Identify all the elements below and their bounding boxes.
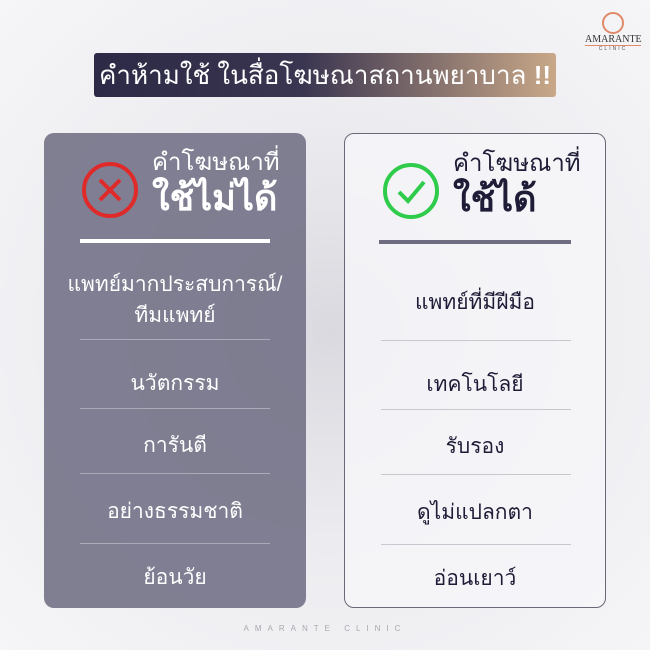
- panel: not allowed: อย่างธรรมชาติ: [107, 500, 243, 523]
- list items: แพทย์มากประสบการณ์/: [67, 273, 282, 296]
- heading: [453, 146, 581, 219]
- panel: not allowed: นวัตกรรม: [131, 372, 219, 395]
- heading: คำโฆษณาที่: [152, 149, 280, 176]
- logo: [585, 12, 642, 52]
- icon: green check: [383, 163, 439, 219]
- list items: แพทย์ที่มีฝีมือ: [415, 291, 535, 314]
- title bar: [94, 53, 556, 97]
- panel: not allowed: [44, 133, 306, 608]
- panel: allowed: อ่อนเยาว์: [434, 567, 516, 590]
- logo: CLINIC: [599, 46, 627, 52]
- heading: ใช้ไม่ได้: [152, 177, 277, 218]
- heading: คำโฆษณาที่: [453, 150, 581, 177]
- panel: allowed: ดูไม่แปลกตา: [417, 501, 533, 524]
- footer: AMARANTE CLINIC: [244, 624, 406, 633]
- panel: allowed: รับรอง: [446, 435, 504, 458]
- panel: not allowed: การันตี: [143, 434, 207, 457]
- title bar: คำห้ามใช้ ในสื่อโฆษณาสถานพยาบาล !!: [99, 60, 551, 90]
- list items: [67, 272, 282, 327]
- panel: allowed: เทคโนโลยี: [426, 373, 524, 396]
- heading: ใช้ได้: [453, 178, 536, 219]
- icon: red X: [82, 162, 138, 218]
- panel: not allowed: ย้อนวัย: [143, 566, 207, 589]
- list items: ทีมแพทย์: [134, 304, 216, 327]
- panel: allowed: [344, 133, 606, 608]
- heading: [152, 145, 280, 218]
- logo: AMARANTE: [585, 34, 642, 45]
